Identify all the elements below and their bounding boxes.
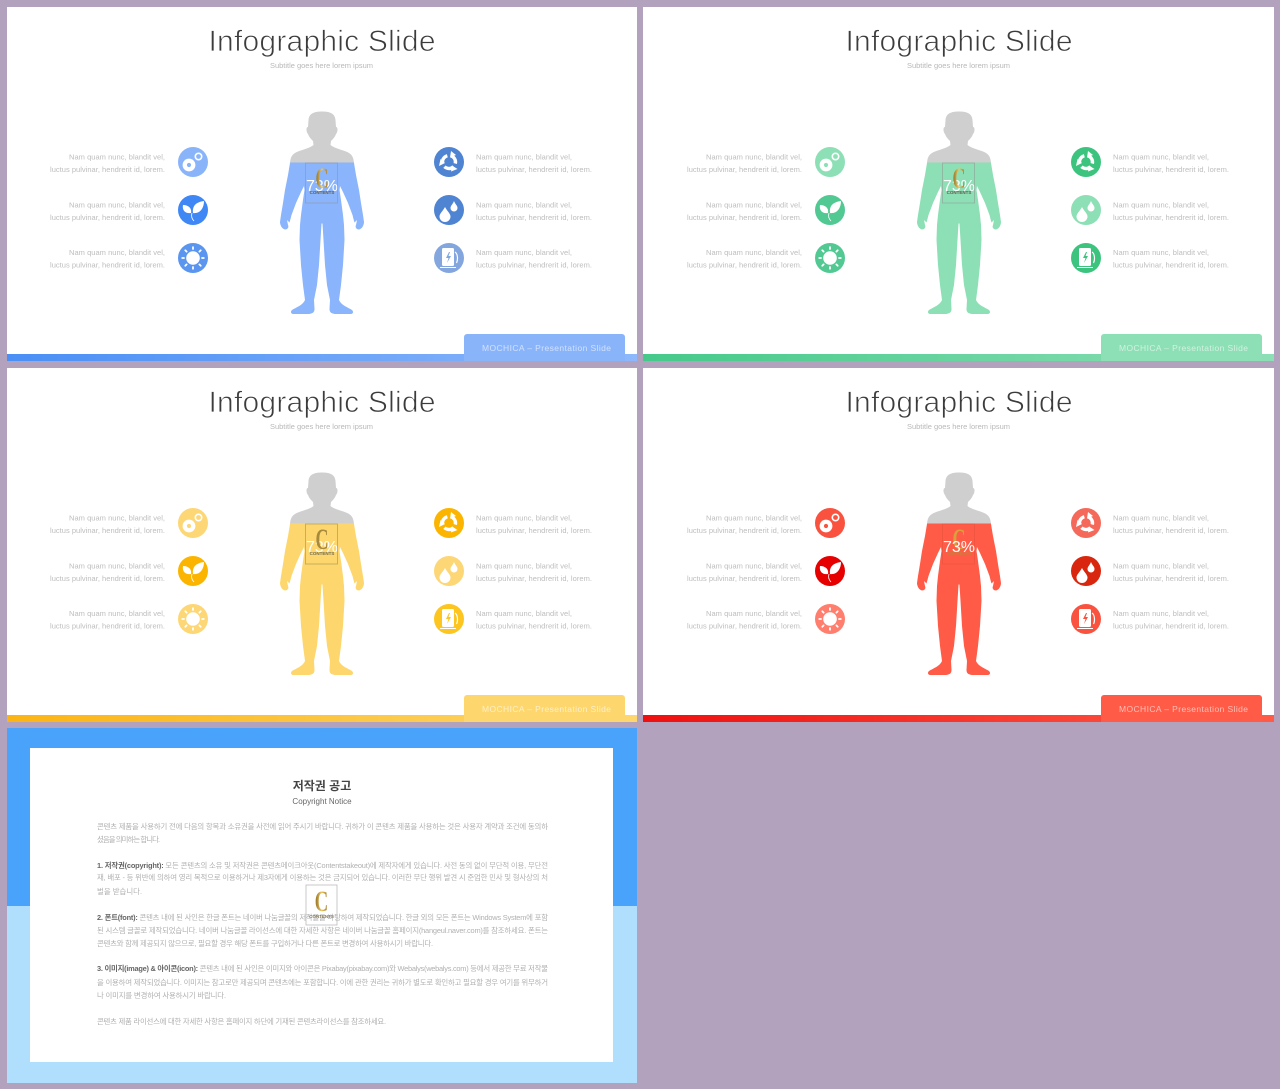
left list — [687, 508, 845, 634]
item text 4: Nam quam nunc, blandit vel, — [1113, 514, 1209, 522]
footer label: MOCHICA – Presentation Slide — [1119, 343, 1248, 353]
item text 6: Nam quam nunc, blandit vel, — [476, 609, 572, 618]
icon: water drops — [434, 556, 464, 586]
human figure chart — [917, 112, 1001, 314]
item text 3: Nam quam nunc, blandit vel, — [69, 248, 165, 257]
watermark: CONTENTS — [310, 190, 334, 195]
item text 2: luctus pulvinar, hendrerit id, lorem. — [50, 213, 165, 222]
item text 2: luctus pulvinar, hendrerit id, lorem. — [687, 574, 802, 583]
item text 2: luctus pulvinar, hendrerit id, lorem. — [687, 213, 802, 222]
icon: leaf — [178, 195, 208, 225]
item text 1: luctus pulvinar, hendrerit id, lorem. — [687, 165, 802, 174]
item text 2: Nam quam nunc, blandit vel, — [69, 562, 165, 570]
watermark — [306, 885, 337, 925]
icon: sun — [815, 243, 845, 273]
panel: copyright notice slide — [7, 728, 637, 1083]
item text 3: Nam quam nunc, blandit vel, — [706, 609, 802, 618]
percentage value: 73% — [943, 539, 975, 556]
item text 1: Nam quam nunc, blandit vel, — [706, 514, 802, 522]
icon: water drops — [434, 195, 464, 225]
left list — [50, 508, 208, 634]
panel: red slide — [643, 368, 1274, 722]
item text 2: Nam quam nunc, blandit vel, — [706, 200, 802, 210]
human figure chart — [917, 472, 1001, 675]
panel: blue slide — [7, 7, 637, 361]
item text 6: luctus pulvinar, hendrerit id, lorem. — [1113, 622, 1229, 630]
item text 6: luctus pulvinar, hendrerit id, lorem. — [476, 260, 592, 270]
icon: leaf — [815, 556, 845, 586]
watermark — [942, 163, 974, 203]
icon: water drops — [1071, 556, 1101, 586]
footer bar — [643, 354, 1274, 361]
copyright paragraph: 재, 배포 - 등 위반에 의하여 영리 목적으로 이용하거나 제3자에게 이용하는 것은 금지되어 있습니다. 이러한 무단 행위 발견 시 준엄한 민사 및 형사상의 처 — [97, 873, 548, 882]
item text 6: Nam quam nunc, blandit vel, — [476, 248, 572, 257]
font paragraph: 2. 폰트(font): 콘텐츠 내에 된 사인은 한글 폰트는 네이버 나눔글꼴의 저작물을 바탕하여 제작되었습니다. 한글 외의 모든 폰트는 Windows System에 포함 — [97, 913, 548, 922]
icon: sun — [178, 243, 208, 273]
item text 1: Nam quam nunc, blandit vel, — [69, 152, 165, 162]
icon: recycle — [434, 147, 464, 177]
item text 4: luctus pulvinar, hendrerit id, lorem. — [476, 526, 592, 535]
footer tab — [1101, 695, 1262, 722]
footer label: MOCHICA – Presentation Slide — [1119, 704, 1248, 714]
item text 1: luctus pulvinar, hendrerit id, lorem. — [50, 165, 165, 174]
watermark — [942, 524, 974, 564]
subtitle: Subtitle goes here lorem ipsum — [907, 422, 1010, 431]
subtitle: Subtitle goes here lorem ipsum — [270, 61, 373, 70]
item text 1: Nam quam nunc, blandit vel, — [706, 152, 802, 162]
subtitle: Subtitle goes here lorem ipsum — [270, 422, 373, 431]
item text 2: luctus pulvinar, hendrerit id, lorem. — [50, 574, 165, 583]
icon: water drops — [1071, 195, 1101, 225]
footer bar — [7, 715, 637, 722]
item text 4: Nam quam nunc, blandit vel, — [476, 152, 572, 162]
watermark: CONTENTS — [309, 914, 334, 919]
icon: leaf — [815, 195, 845, 225]
footer bar — [643, 715, 1274, 722]
percentage value: 73% — [943, 178, 975, 195]
icon: gears — [815, 508, 845, 538]
human figure chart — [280, 472, 364, 675]
icon: sun — [815, 604, 845, 634]
panel: green slide — [643, 7, 1274, 361]
item text 5: Nam quam nunc, blandit vel, — [476, 200, 572, 210]
item text 3: luctus pulvinar, hendrerit id, lorem. — [687, 622, 802, 630]
license paragraph: 콘텐츠 제품 라이선스에 대한 자세한 사항은 홈페이지 하단에 기재된 콘텐츠라이선스를 참조하세요. — [97, 1017, 386, 1026]
item text 6: Nam quam nunc, blandit vel, — [1113, 248, 1209, 257]
title: Infographic Slide — [208, 386, 436, 419]
item text 5: Nam quam nunc, blandit vel, — [1113, 200, 1209, 210]
watermark: CONTENTS — [310, 551, 334, 556]
watermark: C — [316, 524, 328, 556]
copyright paragraph: 1. 저작권(copyright): 모든 콘텐츠의 소유 및 저작권은 콘텐츠메이크아웃(Contentstakeout)에 제작자에게 있습니다. 사전 동의 없이 무단적 이용, 무단전 — [97, 861, 548, 870]
right list — [1071, 508, 1229, 634]
item text 6: Nam quam nunc, blandit vel, — [1113, 609, 1209, 618]
image and icon paragraph: 3. 이미지(image) & 아이콘(icon): 콘텐츠 내에 된 사인은 이미지와 아이콘은 Pixabay(pixabay.com)와 Webalys(webalys.com) 등에서 제공한 무료 저작물 — [97, 964, 548, 973]
image and icon paragraph: 을 이용하여 제작되었습니다. 이미지는 참고로만 제공되며 콘텐츠에는 포함합니다. 이에 관한 권리는 귀하가 별도로 확인하고 필요할 경우 여기를 위무하거 — [97, 978, 548, 987]
item text 1: luctus pulvinar, hendrerit id, lorem. — [687, 526, 802, 535]
right list — [1071, 147, 1229, 273]
icon: sun — [178, 604, 208, 634]
item text 3: luctus pulvinar, hendrerit id, lorem. — [50, 622, 165, 630]
item text 1: Nam quam nunc, blandit vel, — [69, 514, 165, 522]
item text 5: luctus pulvinar, hendrerit id, lorem. — [1113, 574, 1229, 583]
item text 2: Nam quam nunc, blandit vel, — [69, 200, 165, 210]
notice subheading: Copyright Notice — [292, 797, 352, 806]
icon: charger — [1071, 604, 1101, 634]
item text 3: luctus pulvinar, hendrerit id, lorem. — [50, 260, 165, 270]
item text 5: luctus pulvinar, hendrerit id, lorem. — [1113, 213, 1229, 222]
footer bar — [7, 354, 637, 361]
item text 6: luctus pulvinar, hendrerit id, lorem. — [476, 622, 592, 630]
icon: recycle — [434, 508, 464, 538]
intro paragraph: 셨음을 의미하는 합니다. — [97, 835, 160, 844]
watermark: C — [315, 886, 328, 918]
item text 5: Nam quam nunc, blandit vel, — [1113, 562, 1209, 570]
icon: charger — [434, 243, 464, 273]
item text 4: Nam quam nunc, blandit vel, — [1113, 152, 1209, 162]
item text 2: Nam quam nunc, blandit vel, — [706, 562, 802, 570]
item text 1: luctus pulvinar, hendrerit id, lorem. — [50, 526, 165, 535]
watermark: CONTENTS — [947, 190, 971, 195]
icon: charger — [1071, 243, 1101, 273]
icon: gears — [178, 147, 208, 177]
item text 3: Nam quam nunc, blandit vel, — [69, 609, 165, 618]
left list — [50, 147, 208, 273]
item text 5: luctus pulvinar, hendrerit id, lorem. — [476, 574, 592, 583]
notice heading: 저작권 공고 — [293, 778, 351, 793]
watermark: C — [953, 524, 965, 556]
image and icon paragraph: 나 이미지를 변경하여 사용하시기 바랍니다. — [97, 991, 226, 1000]
watermark: CONTENTS — [947, 551, 971, 556]
human figure chart — [280, 112, 364, 314]
item text 5: luctus pulvinar, hendrerit id, lorem. — [476, 213, 592, 222]
font paragraph: 콘텐츠와 함께 제공되지 않으므로, 필요할 경우 해당 폰트를 구입하거나 다른 폰트로 변경하여 사용하시기 바랍니다. — [97, 939, 433, 948]
percentage value: 73% — [306, 178, 338, 195]
title: Infographic Slide — [846, 25, 1072, 58]
watermark: C — [316, 163, 328, 195]
intro paragraph: 콘텐츠 제품을 사용하기 전에 다음의 항목과 소유권을 사전에 읽어 주시기 바랍니다. 귀하가 이 콘텐츠 제품을 사용하는 것은 사용자 계약과 조건에 동의하 — [97, 822, 548, 831]
copyright paragraph: 벌을 받습니다. — [97, 887, 142, 896]
icon: charger — [434, 604, 464, 634]
item text 5: Nam quam nunc, blandit vel, — [476, 562, 572, 570]
title: Infographic Slide — [846, 386, 1072, 419]
subtitle: Subtitle goes here lorem ipsum — [907, 61, 1010, 70]
right list — [434, 147, 592, 273]
icon: gears — [178, 508, 208, 538]
item text 4: luctus pulvinar, hendrerit id, lorem. — [476, 165, 592, 174]
watermark — [306, 524, 338, 564]
right list — [434, 508, 592, 634]
item text 4: Nam quam nunc, blandit vel, — [476, 514, 572, 522]
icon: recycle — [1071, 508, 1101, 538]
panel: yellow slide — [7, 368, 637, 722]
icon: gears — [815, 147, 845, 177]
watermark — [306, 163, 338, 203]
font paragraph: 된 시스템 글꼴로 제작되었습니다. 네이버 나눔글꼴 라이선스에 대한 자세한 사항은 네이버 나눔글꼴 홈페이지(hangeul.naver.com)를 참조하세요. 폰트는 — [97, 926, 548, 935]
item text 6: luctus pulvinar, hendrerit id, lorem. — [1113, 260, 1229, 270]
footer label: MOCHICA – Presentation Slide — [482, 343, 611, 353]
percentage value: 73% — [306, 539, 338, 556]
item text 4: luctus pulvinar, hendrerit id, lorem. — [1113, 526, 1229, 535]
footer tab — [464, 695, 625, 722]
title: Infographic Slide — [208, 25, 436, 58]
footer tab — [464, 334, 625, 361]
left list — [687, 147, 845, 273]
icon: leaf — [178, 556, 208, 586]
watermark: C — [953, 163, 965, 195]
icon: recycle — [1071, 147, 1101, 177]
item text 4: luctus pulvinar, hendrerit id, lorem. — [1113, 165, 1229, 174]
item text 3: luctus pulvinar, hendrerit id, lorem. — [687, 260, 802, 270]
item text 3: Nam quam nunc, blandit vel, — [706, 248, 802, 257]
footer label: MOCHICA – Presentation Slide — [482, 704, 611, 714]
footer tab — [1101, 334, 1262, 361]
